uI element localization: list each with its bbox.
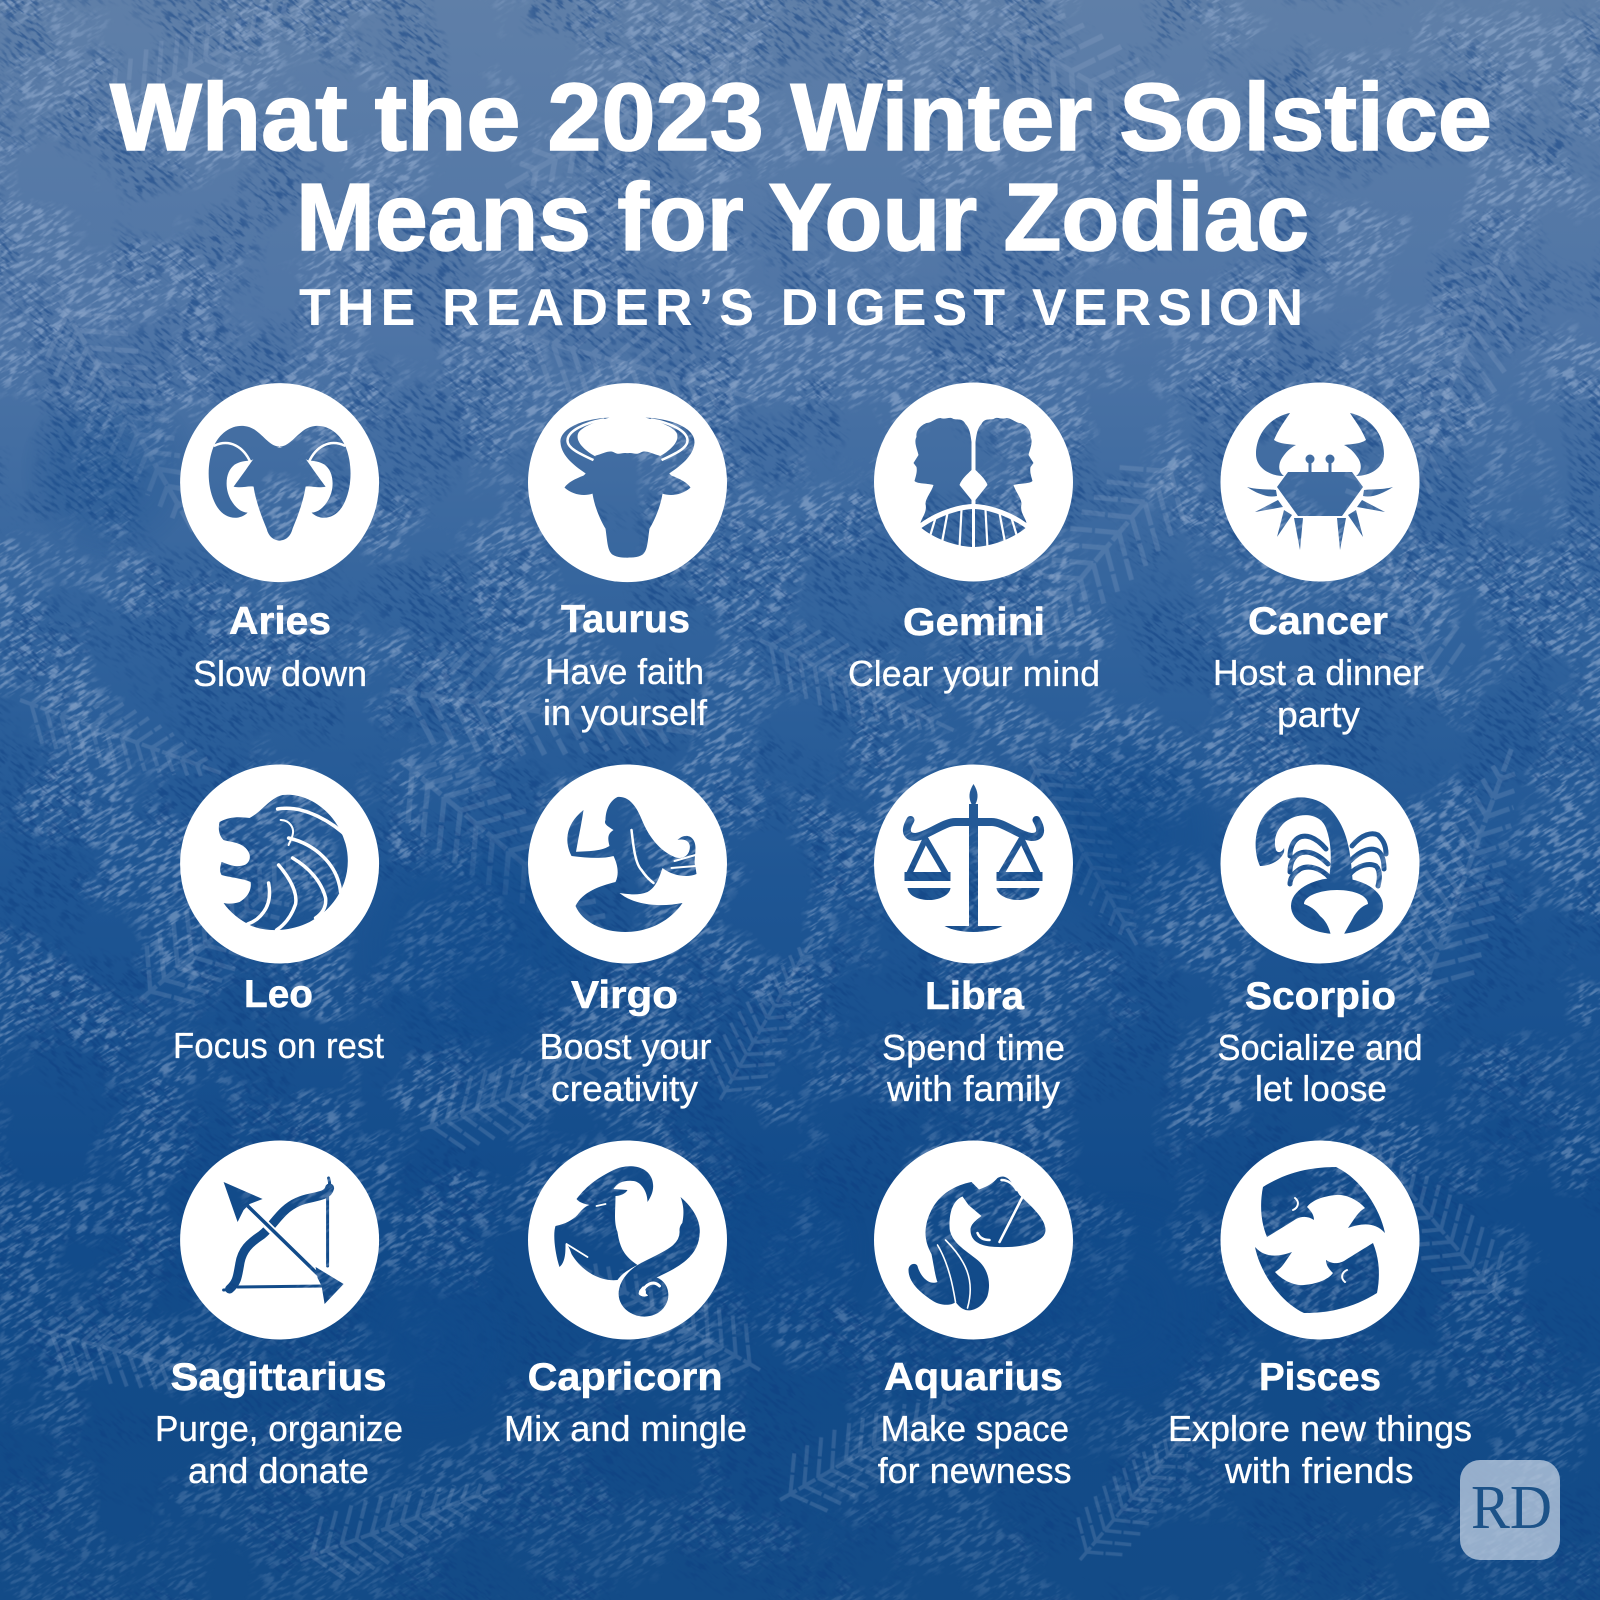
tip: for newness [878, 1450, 1072, 1491]
name: Virgo [571, 974, 678, 1017]
logo: RD badge: RD [1471, 1474, 1552, 1542]
name: Sagittarius [170, 1356, 386, 1399]
panel: Leo [173, 764, 384, 1066]
title [110, 64, 1492, 271]
panel: Scorpio [1218, 764, 1422, 1109]
icon: two fish [1220, 1140, 1420, 1340]
panel: Capricorn [504, 1140, 747, 1449]
panel: Gemini [848, 382, 1100, 694]
name: Libra [925, 975, 1024, 1018]
icon: scorpion [1220, 764, 1420, 964]
panel: Aquarius [874, 1140, 1073, 1491]
subtitle: THE READER’S DIGEST VERSION [299, 279, 1303, 337]
tip: Purge, organize [155, 1408, 403, 1449]
tip: Focus on rest [173, 1025, 384, 1066]
name: Taurus [561, 598, 690, 641]
name: Aquarius [884, 1356, 1063, 1399]
tip: Have faith [545, 651, 704, 692]
tip [543, 651, 708, 733]
panel: Sagittarius [155, 1140, 403, 1491]
name: Gemini [903, 601, 1045, 644]
icon: bow and arrow [180, 1140, 379, 1340]
name: Leo [244, 973, 313, 1016]
name: Capricorn [528, 1356, 723, 1399]
tip [1213, 652, 1424, 735]
tip: Make space [881, 1408, 1069, 1449]
tip: Spend time [882, 1027, 1065, 1068]
tip: with family [886, 1068, 1060, 1109]
icon: crab [1220, 382, 1420, 582]
icon: ram [180, 383, 379, 582]
title: Means for Your Zodiac [296, 164, 1309, 271]
title: What the 2023 Winter Solstice [110, 64, 1492, 171]
tip: with friends [1224, 1450, 1414, 1491]
logo: RD badge [1460, 1460, 1560, 1560]
tip: and donate [188, 1450, 369, 1491]
panel: Cancer [1213, 382, 1424, 735]
tip: Boost your [540, 1026, 712, 1067]
tip: party [1277, 694, 1360, 735]
icon: bull [528, 383, 727, 582]
panel: Pisces [1168, 1140, 1472, 1491]
tip: Socialize and [1218, 1027, 1422, 1068]
name: Pisces [1259, 1356, 1381, 1399]
icon: maiden [528, 764, 727, 964]
name: Aries [229, 600, 331, 643]
panel: Virgo [528, 764, 727, 1109]
tip: let loose [1255, 1068, 1387, 1109]
icon: lion [180, 764, 379, 964]
tip: Mix and mingle [504, 1408, 747, 1449]
panel: Libra [874, 764, 1073, 1109]
icon: water bearer urn [874, 1140, 1073, 1340]
tip [1218, 1027, 1422, 1109]
panel: Taurus [528, 383, 727, 733]
name: Scorpio [1245, 975, 1396, 1018]
tip: Host a dinner [1213, 652, 1424, 693]
tip: Clear your mind [848, 653, 1100, 694]
tip [540, 1026, 712, 1109]
name: Cancer [1248, 600, 1388, 643]
icon: scales [874, 764, 1073, 964]
tip [882, 1027, 1065, 1109]
tip: Slow down [193, 653, 367, 694]
tip [1168, 1408, 1472, 1491]
tip: in yourself [543, 692, 708, 733]
tip [155, 1408, 403, 1491]
panel: Aries [180, 383, 379, 694]
tip: creativity [551, 1068, 698, 1109]
tip: Explore new things [1168, 1408, 1472, 1449]
icon: sea goat [528, 1140, 727, 1340]
icon: twins [874, 382, 1073, 582]
tip [878, 1408, 1072, 1491]
